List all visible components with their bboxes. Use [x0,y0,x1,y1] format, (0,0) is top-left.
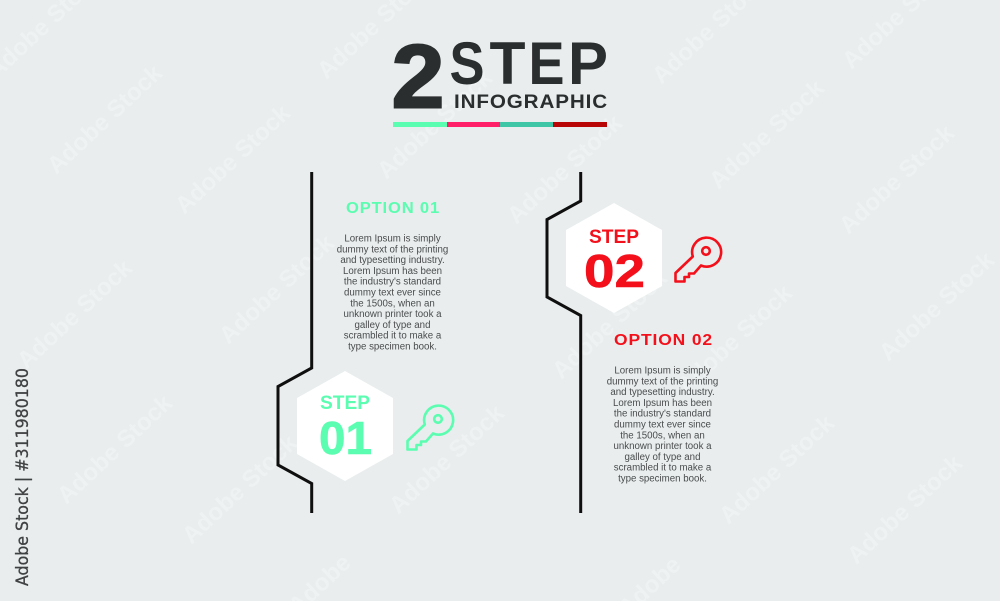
text: Adobe Stock [834,119,960,239]
title word STEP: E [528,30,564,97]
heading: option 02: OPTION 02 [614,332,713,349]
body text: option 01: and typesetting industry. [340,255,445,266]
body text: option 02: dummy text ever since [614,420,711,430]
text: Adobe Stock [547,264,673,384]
title word STEP [450,30,608,97]
label: STEP: STEP [320,393,370,414]
body text: option 02: and typesetting industry. [610,387,715,398]
title word STEP: T [490,30,526,97]
body text: option 02: type specimen book. [618,474,707,484]
text: Adobe Stock [672,279,798,399]
icon: key 01 [408,406,453,450]
body text: option 02 [607,366,718,484]
body text: option 01 [337,234,448,352]
body text: option 01: scrambled it to make a [344,331,442,342]
connector line: step 02 [547,172,581,513]
text: Adobe Stock [214,229,340,349]
body text: option 02: Lorem Ipsum has been [613,398,712,409]
title word STEP: P [568,30,608,97]
body text: option 02: scrambled it to make a [614,463,712,474]
text: Adobe Stock [714,409,840,529]
text: Adobe Stock [42,59,168,179]
text: Adobe Stock [12,254,138,374]
text: Adobe Stock [52,389,178,509]
icon: key 02 [676,238,721,282]
panel: step 01 badge [297,371,393,481]
text: Adobe Stock [384,399,510,519]
body text: option 02: the 1500s, when an [620,430,705,441]
title numeral 2: 2 [392,28,444,128]
body text: option 01: dummy text ever since [344,288,441,298]
body text: option 02: Lorem Ipsum is simply [614,366,711,376]
connector line: step 01 [278,172,312,513]
text: Adobe Stock [372,64,498,184]
text: Adobe Stock [842,449,968,569]
body text: option 02: dummy text of the printing [607,376,718,387]
body text: option 01: type specimen book. [348,342,437,352]
body text: option 01: unknown printer took a [343,309,442,320]
number: 02: 02 [584,245,645,297]
body text: option 02: the industry's standard [614,409,711,420]
panel: step 02 badge [566,203,662,313]
body text: option 01: galley of type and [355,320,430,331]
title: 2 STEP INFOGRAPHIC [392,28,608,128]
text: Adobe Stock [502,109,628,229]
panel: option 02 text [607,332,718,484]
hexagon: step 02 [566,203,662,313]
text: Adobe Stock [170,99,296,219]
body text: option 02: unknown printer took a [613,441,712,452]
panel: option 01 text [337,200,448,352]
title word STEP: S [450,30,484,97]
text: Adobe Stock [177,429,303,549]
number: 01: 01 [319,412,372,464]
title word INFOGRAPHIC: INFOGRAPHIC [454,92,608,113]
body text: option 01: Lorem Ipsum is simply [344,234,441,244]
hexagon: step 01 [297,371,393,481]
body text: option 01: Lorem Ipsum has been [343,266,442,277]
body text: option 01: dummy text of the printing [337,244,448,255]
colour bar under title [393,122,607,127]
text: Adobe Stock [704,74,830,194]
watermark id: Adobe Stock number: Adobe Stock | #311980180 [13,368,33,586]
heading: option 01: OPTION 01 [346,200,440,217]
body text: option 02: galley of type and [625,452,700,463]
label: STEP: STEP [589,227,639,248]
text: Adobe Stock [874,246,1000,366]
body text: option 01: the industry's standard [344,277,441,288]
body text: option 01: the 1500s, when an [350,298,435,309]
